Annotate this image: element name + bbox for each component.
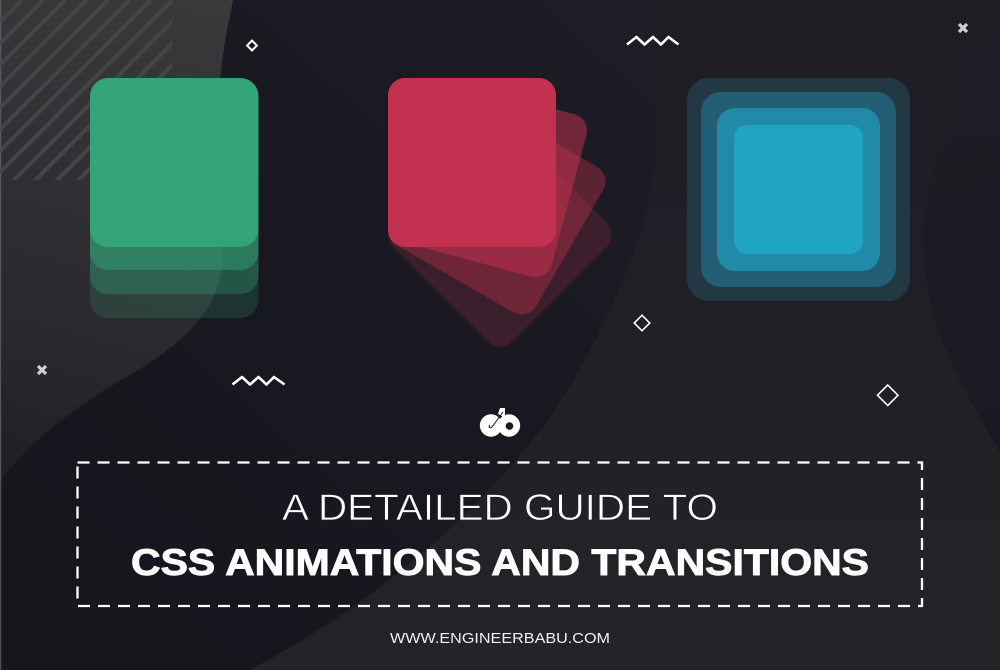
diamond middle <box>634 315 650 331</box>
diagonal stripe pattern <box>0 0 172 180</box>
dashed title frame <box>78 462 922 606</box>
title line 2: CSS ANIMATIONS AND TRANSITIONS <box>131 541 869 583</box>
zigzag top <box>627 37 678 44</box>
x mark top right <box>959 24 967 32</box>
rotating red squares <box>381 75 619 354</box>
x mark left <box>38 366 46 374</box>
diamond small <box>247 41 257 50</box>
title line 1: A DETAILED GUIDE TO <box>282 486 718 528</box>
logo <box>480 408 520 437</box>
zigzag lower left <box>232 377 284 384</box>
website url: WWW.ENGINEERBABU.COM <box>390 630 610 647</box>
nested blue squares <box>687 78 910 301</box>
stacked green squares <box>90 78 258 318</box>
diamond right <box>877 385 898 406</box>
